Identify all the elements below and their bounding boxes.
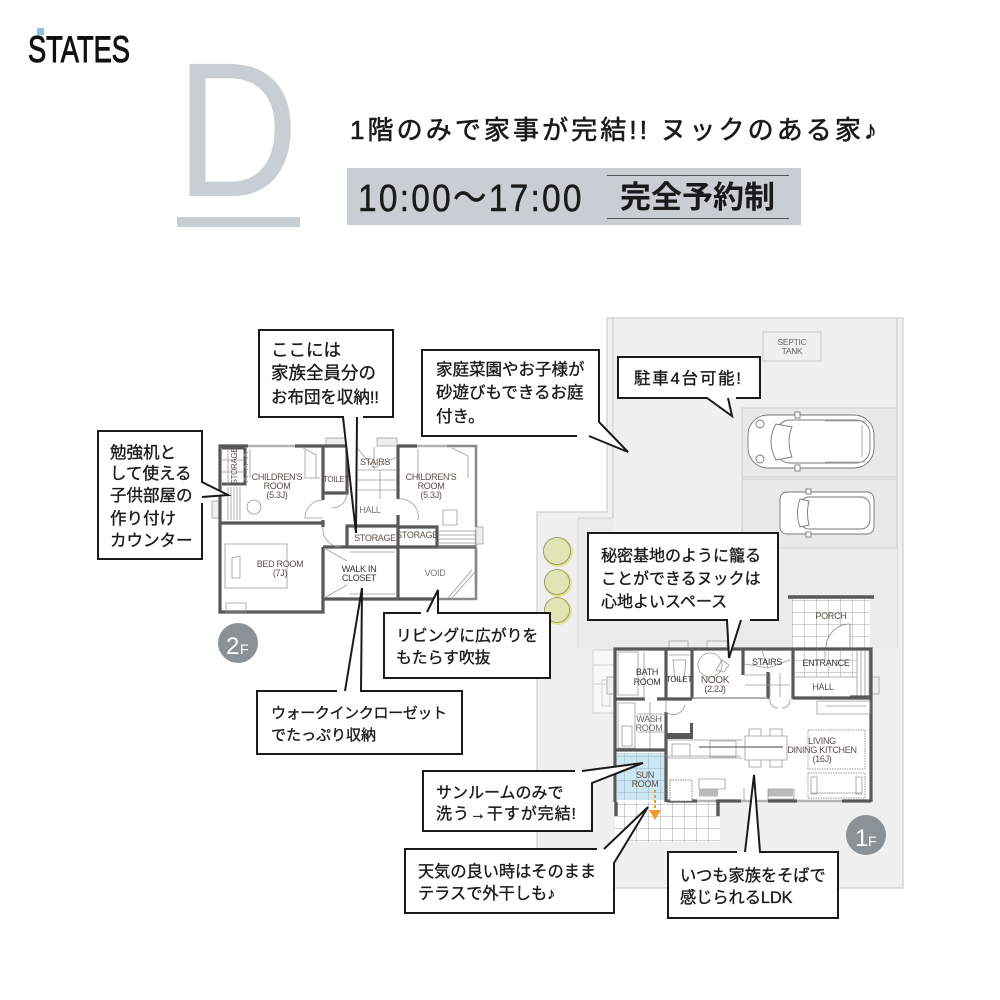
parking space 2 with car xyxy=(742,479,897,548)
badge 2F: F xyxy=(240,641,249,657)
kitchen and dining furniture xyxy=(665,701,870,801)
1F room labels: HALL xyxy=(812,682,834,692)
callout: study counter xyxy=(98,431,228,559)
time band: 完全予約制 xyxy=(620,180,775,215)
callout: LDK: 感じられるLDK xyxy=(680,889,793,907)
porch: PORCH xyxy=(815,611,847,621)
callout: walk-in closet: でたっぷり収納 xyxy=(271,727,376,744)
callout: study counter: 勉強机と xyxy=(110,443,176,462)
badge 1F xyxy=(846,815,886,855)
1F room labels: BATH xyxy=(636,667,658,677)
1F room labels: ROOM xyxy=(632,779,658,789)
callout: garden xyxy=(422,350,628,452)
2F room labels: (5.3J) xyxy=(266,490,288,500)
callout: futon storage: ここには xyxy=(271,340,341,360)
2F room labels: CHILDREN'S xyxy=(252,472,303,482)
2F walls xyxy=(220,446,476,612)
septic tank: SEPTIC xyxy=(778,337,807,347)
1F room labels: (2.2J) xyxy=(704,684,726,694)
2F room labels: STORAGE xyxy=(396,530,438,540)
septic tank xyxy=(763,332,821,361)
1F room labels xyxy=(632,657,857,789)
shrubs xyxy=(543,537,573,625)
callout: parking xyxy=(618,357,760,416)
2F room labels xyxy=(230,448,457,583)
1F room labels: ROOM xyxy=(634,677,660,687)
nook partition line xyxy=(692,697,768,699)
2F windows xyxy=(212,438,483,612)
2F room labels: ROOM xyxy=(418,481,444,491)
time band xyxy=(347,168,801,225)
1F room labels: DINING KITCHEN xyxy=(787,745,857,755)
callout: terrace drying: 天気の良い時はそのまま xyxy=(418,863,596,881)
callout: nook: ことができるヌックは xyxy=(601,570,761,588)
2F room labels: CLOSET xyxy=(342,573,377,583)
terrace xyxy=(615,802,720,842)
porch xyxy=(788,597,874,649)
callout: sun room xyxy=(423,763,643,831)
2F room labels: ROOM xyxy=(264,481,290,491)
callout: walk-in closet: ウォークインクローゼット xyxy=(271,705,447,722)
callout: LDK: いつも家族をそばで xyxy=(680,867,826,885)
badge 2F xyxy=(218,623,258,663)
1F room labels: NOOK xyxy=(701,675,730,686)
callout: futon storage xyxy=(259,330,393,533)
1F room labels: ENTRANCE xyxy=(802,658,850,668)
callout: garden: 砂遊びもできるお庭 xyxy=(436,383,584,402)
kitchen partition xyxy=(667,723,693,739)
2F room labels: WALK IN xyxy=(342,564,376,574)
doors and furniture xyxy=(225,448,476,612)
1F room labels: SUN xyxy=(636,770,654,780)
wash room xyxy=(618,702,664,750)
study counter xyxy=(228,487,240,520)
2F room labels: HALL xyxy=(359,505,381,515)
2F room labels: VOID xyxy=(425,568,446,578)
2F room labels: STAIRS xyxy=(360,457,390,467)
stairs xyxy=(358,447,397,499)
callout: futon storage: お布団を収納!! xyxy=(271,388,379,407)
1F room labels: (16J) xyxy=(812,754,832,764)
orange arrow xyxy=(649,790,661,820)
callout: garden: 家庭菜園やお子様が xyxy=(436,360,585,379)
callout: sun room: 洗う→干すが完結! xyxy=(436,805,576,823)
callout: void: もたらす吹抜 xyxy=(396,649,491,667)
badge 1F: F xyxy=(868,833,877,849)
callout: nook: 秘密基地のように籠る xyxy=(601,546,761,565)
callout: void: リビングに広がりを xyxy=(396,627,538,645)
badge 1F: 1 xyxy=(855,825,868,852)
floor plan 1F xyxy=(593,597,879,842)
callout: garden: 付き。 xyxy=(436,407,485,426)
1F room labels: TOILET xyxy=(666,675,692,684)
callout: walk-in closet xyxy=(257,588,462,754)
large letter D: D xyxy=(176,22,299,237)
callout: nook: 心地よいスペース xyxy=(601,593,727,611)
2F room labels: STORAGE xyxy=(230,448,239,484)
1F room labels: ROOM xyxy=(636,723,662,733)
badge 2F: 2 xyxy=(226,633,239,660)
callout: void xyxy=(384,590,550,678)
callout: study counter: 作り付け xyxy=(110,509,176,528)
parking space 1 with car xyxy=(742,408,897,477)
sun room tint xyxy=(617,753,665,800)
1F room labels: WASH xyxy=(636,714,662,724)
callout: terrace drying xyxy=(405,807,648,913)
2F room labels: CHILDREN'S xyxy=(406,472,457,482)
1F windows xyxy=(607,641,879,801)
1F room labels: LIVING xyxy=(808,736,836,746)
2F room labels: BED ROOM xyxy=(257,559,303,569)
heading: 1階のみで家事が完結!! ヌックのある家♪ xyxy=(350,115,877,145)
callout: study counter: 子供部屋の xyxy=(110,486,192,505)
entrance tile xyxy=(795,651,869,697)
callout: LDK xyxy=(668,775,838,918)
callout: parking: 駐車4台可能! xyxy=(634,369,741,388)
2F room labels: (7J) xyxy=(273,568,287,578)
callout: sun room: サンルームのみで xyxy=(436,785,564,802)
time band: 10:00〜17:00 xyxy=(358,177,582,219)
exterior unit xyxy=(593,650,615,713)
2F room labels: TOILET xyxy=(323,475,349,484)
2F room labels: (5.3J) xyxy=(420,490,442,500)
callout: terrace drying: テラスで外干しも♪ xyxy=(418,885,555,903)
callout: nook xyxy=(588,533,778,658)
1F room labels: STAIRS xyxy=(752,657,782,667)
floor plan 2F xyxy=(212,438,483,612)
logo: STATES: STATES xyxy=(28,29,130,70)
storage closet left xyxy=(222,448,248,484)
bath, toilet, stairs xyxy=(618,650,825,714)
callout: study counter: カウンター xyxy=(110,531,192,550)
callout: study counter: して使える xyxy=(110,464,192,483)
1F walls xyxy=(615,649,871,802)
callout: futon storage: 家族全員分の xyxy=(271,363,376,383)
2F room labels: STORAGE xyxy=(354,533,396,543)
septic tank: TANK xyxy=(782,346,803,356)
site plan ground xyxy=(537,318,903,888)
